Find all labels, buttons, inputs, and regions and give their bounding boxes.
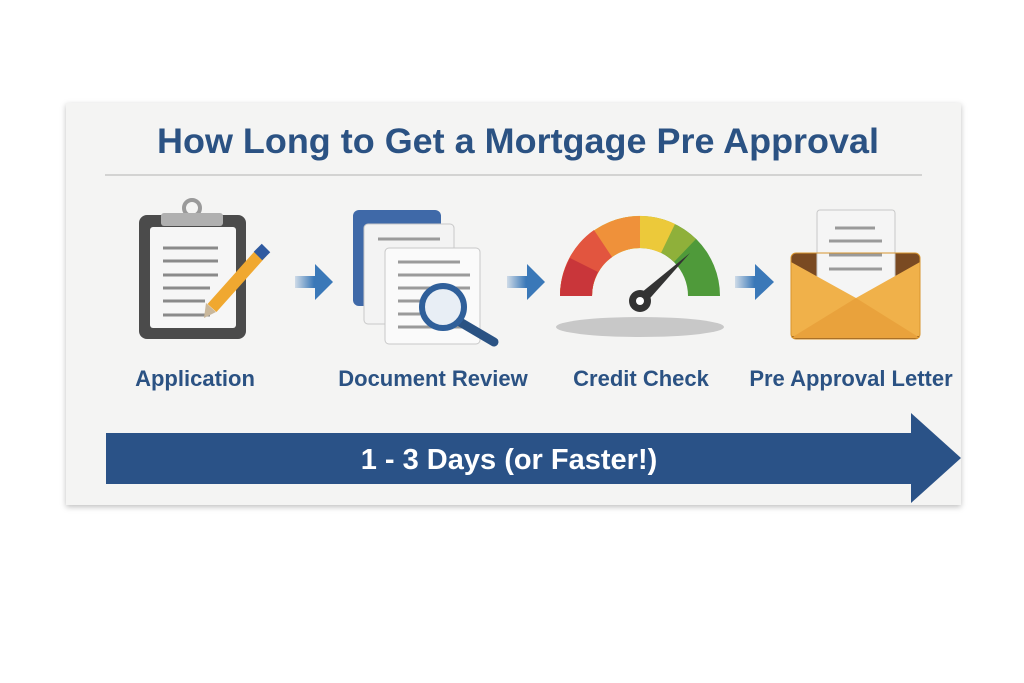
timeline arrow: 1 - 3 Days (or Faster!): [361, 444, 657, 476]
icon: credit gauge: [556, 216, 724, 337]
labels: Credit Check: [573, 366, 710, 391]
arrow 3: [735, 264, 774, 300]
icon: documents with magnifier: [353, 210, 494, 344]
timeline arrow: [106, 413, 961, 503]
labels: Document Review: [338, 366, 529, 391]
arrow 1: [295, 264, 333, 300]
arrow 2: [507, 264, 545, 300]
panel: card: [66, 103, 961, 505]
title: How Long to Get a Mortgage Pre Approval: [157, 122, 879, 161]
labels: [135, 366, 953, 391]
labels: Application: [135, 366, 255, 391]
icon: clipboard: [139, 200, 266, 339]
labels: Pre Approval Letter: [749, 366, 953, 391]
icon: envelope with letter: [791, 210, 920, 339]
